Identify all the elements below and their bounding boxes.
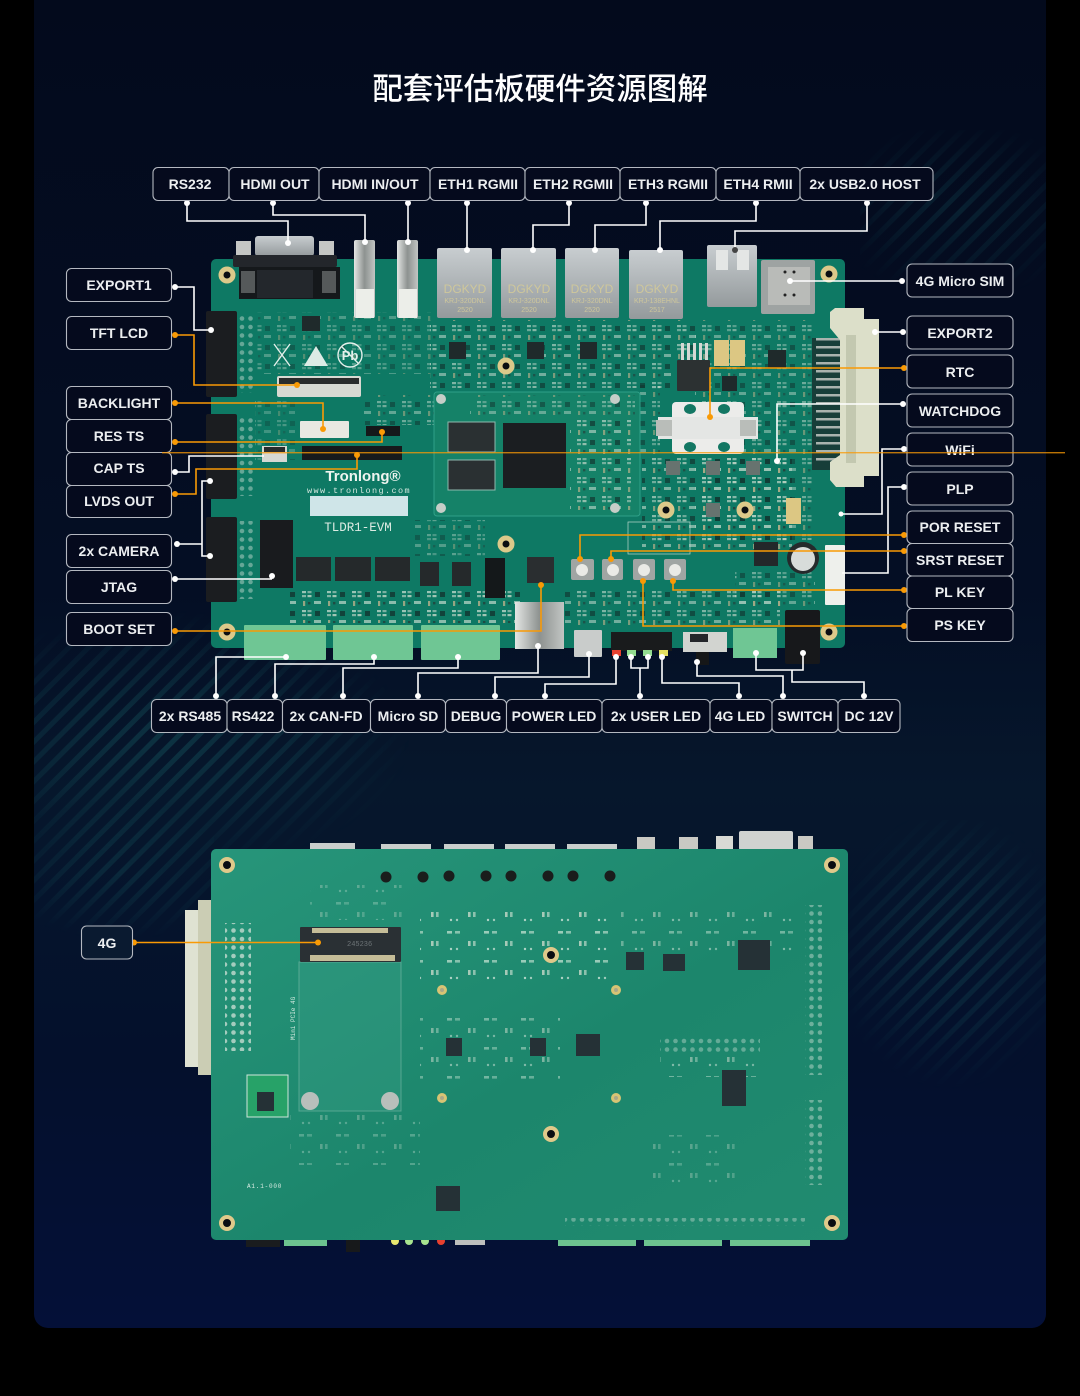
callout: ETH1 RGMII: ETH1 RGMII <box>438 176 518 192</box>
callout: 2x USER LED <box>602 654 710 732</box>
mini PCIe slot: 245236 <box>347 941 372 949</box>
callout: PLP: PLP <box>946 481 974 497</box>
callout: 4G <box>82 926 321 959</box>
silkscreen: brand: Tronlong® <box>325 468 401 485</box>
callout: Micro SD <box>370 643 541 732</box>
power chip and tantalum capacitors <box>677 340 801 524</box>
wifi module <box>247 1075 288 1117</box>
copper vias <box>438 986 620 1102</box>
callout: 4G LED <box>659 654 772 732</box>
ethernet jacks: 2520 <box>457 307 473 314</box>
callout: HDMI IN/OUT <box>319 168 430 245</box>
callout: BOOT SET <box>66 582 544 646</box>
ethernet jacks: 2520 <box>584 307 600 314</box>
mounting holes <box>221 268 835 638</box>
callout: ETH4 RMII: ETH4 RMII <box>723 176 793 192</box>
surface components <box>255 312 815 626</box>
large ICs <box>436 940 770 1211</box>
callout: 2x RS485: 2x RS485 <box>159 708 221 724</box>
callout: ETH2 RGMII: ETH2 RGMII <box>533 176 613 192</box>
callout: WATCHDOG: WATCHDOG <box>919 403 1001 419</box>
callout: SWITCH: SWITCH <box>777 708 833 724</box>
JTAG connector <box>260 520 293 588</box>
callout: ETH3 RGMII <box>592 168 716 253</box>
callout: POWER LED <box>506 654 619 732</box>
guide line <box>162 452 1065 453</box>
callout: 4G Micro SIM <box>787 264 1013 297</box>
callout: PS KEY <box>640 578 1013 642</box>
callout: RS232: RS232 <box>169 176 212 192</box>
callout: 2x CAMERA <box>66 478 213 568</box>
power switch <box>683 632 727 665</box>
callout: RES TS <box>66 420 385 452</box>
callout: WATCHDOG <box>774 394 1013 464</box>
callout: POR RESET: POR RESET <box>920 519 1001 535</box>
silkscreen: brand: www.tronlong.com <box>307 486 411 496</box>
callout: RTC <box>707 355 1013 420</box>
callout: DC 12V <box>753 650 900 732</box>
PHY chips <box>302 316 786 391</box>
callout: 4G Micro SIM: 4G Micro SIM <box>916 273 1004 289</box>
silkscreen symbols: Pb <box>342 348 358 363</box>
EXPORT2 connector <box>812 308 879 487</box>
callout: ETH3 RGMII: ETH3 RGMII <box>628 176 708 192</box>
RS232 connector <box>233 236 340 299</box>
callout: DEBUG <box>446 651 592 732</box>
board connectors: backlight, RES TS, CAP TS, LVDS <box>262 421 402 462</box>
silkscreen: brand: TLDR1-EVM <box>324 521 392 535</box>
callout: CAP TS <box>66 452 264 486</box>
push buttons <box>571 559 686 580</box>
through-hole pins <box>380 870 616 882</box>
callout: 2x CAMERA: 2x CAMERA <box>79 543 159 559</box>
HDMI connectors <box>354 240 418 318</box>
callout: PS KEY: PS KEY <box>934 617 986 633</box>
callout: 2x CAN-FD: 2x CAN-FD <box>289 708 363 724</box>
callout: WiFi <box>838 433 1013 516</box>
ethernet jacks: DGKYD <box>636 282 679 296</box>
callout: HDMI OUT: HDMI OUT <box>240 176 310 192</box>
silkscreen version: A1.1-000 <box>247 1183 282 1190</box>
TFT LCD connector <box>277 376 361 397</box>
USB host connector <box>707 245 757 307</box>
power MOSFET <box>754 542 778 566</box>
boot DIP switch <box>527 557 554 583</box>
callout: WiFi: WiFi <box>945 442 975 458</box>
back view of the evaluation board <box>185 831 848 1252</box>
ethernet jacks: KRJ-320DNL <box>571 298 613 305</box>
callout: RES TS: RES TS <box>94 428 144 444</box>
micro SIM slot <box>761 260 815 314</box>
ethernet jacks: KRJ-138EHNL <box>634 298 680 305</box>
LED header <box>611 632 672 656</box>
callout: HDMI IN/OUT: HDMI IN/OUT <box>331 176 419 192</box>
callout: PLP <box>842 472 1013 573</box>
callout: LVDS OUT: LVDS OUT <box>84 493 154 509</box>
callout: 2x CAN-FD <box>282 654 461 732</box>
ethernet jacks: DGKYD <box>444 282 487 296</box>
callout: 2x RS485 <box>152 654 289 732</box>
front view of the evaluation board <box>206 236 879 665</box>
EXPORT connector edge <box>185 900 212 1075</box>
ethernet jacks <box>437 248 683 319</box>
core module <box>434 392 640 516</box>
mini PCIe slot: Mini PCIe 4G <box>290 996 297 1040</box>
top edge connectors <box>310 831 813 851</box>
mini PCIe slot <box>290 927 401 1111</box>
callout: SRST RESET: SRST RESET <box>916 552 1004 568</box>
callout: RS232 <box>153 168 291 246</box>
callout: PL KEY: PL KEY <box>935 584 986 600</box>
callout: 2x USB2.0 HOST <box>732 168 933 253</box>
callout: DEBUG: DEBUG <box>451 708 501 724</box>
callout: 4G LED: 4G LED <box>715 708 765 724</box>
callout: BACKLIGHT: BACKLIGHT <box>78 395 161 411</box>
callout: ETH1 RGMII <box>430 168 525 253</box>
callout: CAP TS: CAP TS <box>93 460 145 476</box>
callout: Micro SD: Micro SD <box>378 708 438 724</box>
ethernet jacks: 2520 <box>521 307 537 314</box>
silkscreen: brand <box>307 468 411 535</box>
ethernet jacks: KRJ-320DNL <box>508 298 550 305</box>
USB type-C debug port <box>574 630 602 657</box>
ethernet jacks: DGKYD <box>571 282 614 296</box>
solder and passive details <box>225 885 822 1226</box>
DC 12V jack <box>785 610 820 664</box>
callout: 2x USB2.0 HOST: 2x USB2.0 HOST <box>809 176 921 192</box>
left header blocks <box>206 311 254 602</box>
callout: POR RESET <box>577 511 1013 562</box>
callout: EXPORT1 <box>66 268 214 333</box>
callout: ETH2 RGMII <box>525 168 620 253</box>
callout: RTC: RTC <box>946 364 974 380</box>
PLP connector <box>825 545 845 605</box>
electrolytic capacitor <box>787 542 819 574</box>
IO terminals <box>244 625 777 660</box>
callout: JTAG <box>66 570 275 604</box>
callout: SRST RESET <box>608 544 1013 576</box>
title: 配套评估板硬件资源图解 <box>372 64 708 108</box>
callout: POWER LED: POWER LED <box>512 708 596 724</box>
callout: JTAG: JTAG <box>101 579 137 595</box>
micro SD slot <box>515 602 564 649</box>
callout: TFT LCD: TFT LCD <box>90 325 148 341</box>
driver chips <box>296 557 505 598</box>
callout: EXPORT1: EXPORT1 <box>86 277 152 293</box>
pcb base <box>211 259 845 648</box>
callout: 2x USER LED: 2x USER LED <box>611 708 701 724</box>
boot table <box>628 522 690 554</box>
ethernet jacks: 2517 <box>649 307 665 314</box>
mounting holes <box>221 859 838 1229</box>
callout: RS422: RS422 <box>232 708 275 724</box>
inductors <box>666 461 760 517</box>
callout: TFT LCD <box>66 316 300 388</box>
silkscreen symbols <box>274 343 362 367</box>
callout: DC 12V: DC 12V <box>844 708 894 724</box>
callout: ETH4 RMII <box>657 168 800 253</box>
callout: BACKLIGHT <box>66 386 326 432</box>
ethernet jacks: DGKYD <box>508 282 551 296</box>
callout: BOOT SET: BOOT SET <box>83 621 155 637</box>
pcb base <box>211 849 848 1240</box>
callout: EXPORT2 <box>872 316 1013 349</box>
callout: RS422 <box>227 654 377 732</box>
callout: 4G: 4G <box>98 935 116 951</box>
callout: PL KEY <box>670 576 1013 608</box>
callout: HDMI OUT <box>229 168 368 245</box>
callout: EXPORT2: EXPORT2 <box>927 325 993 341</box>
ethernet jacks: KRJ-320DNL <box>444 298 486 305</box>
bottom edge connectors <box>246 1237 810 1252</box>
callout: SWITCH <box>694 659 838 732</box>
callout: LVDS OUT <box>66 452 360 518</box>
RTC battery holder <box>656 402 758 454</box>
